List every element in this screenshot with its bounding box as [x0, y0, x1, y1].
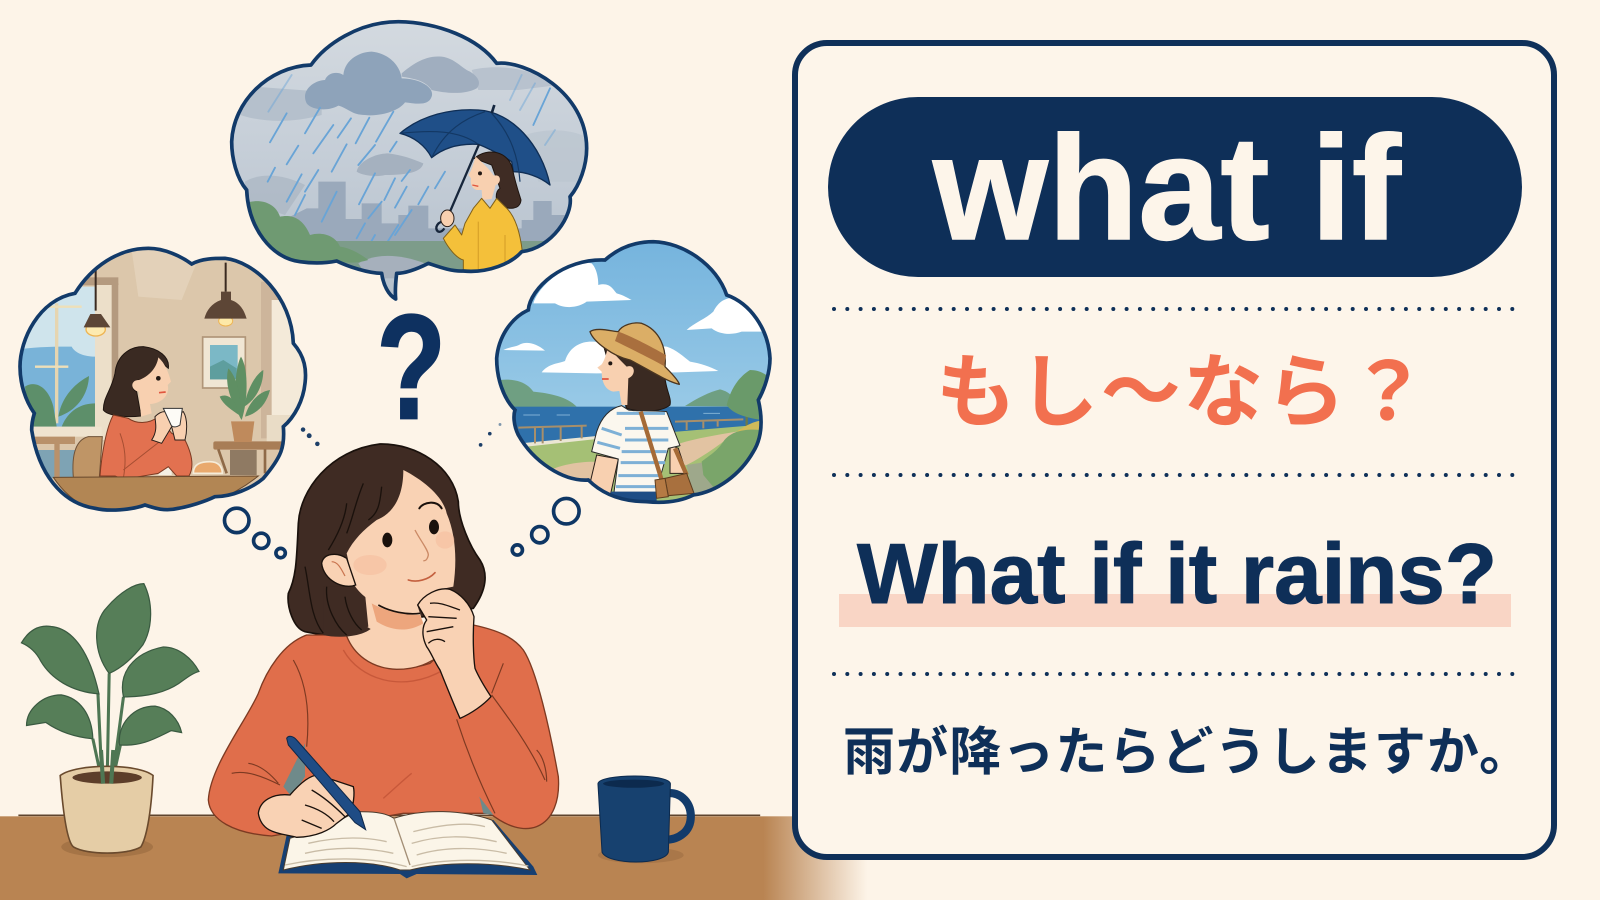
grass [528, 426, 746, 500]
thought bubble: rainy scene [225, 15, 595, 305]
left window [24, 286, 95, 357]
pen [287, 736, 366, 830]
bushes [702, 430, 759, 487]
heading pill: what if [828, 97, 1522, 277]
tree [746, 416, 748, 426]
striped shirt [592, 406, 680, 492]
nose [415, 530, 428, 561]
thought bubble: cafe scene [15, 240, 315, 520]
cheeks [353, 555, 387, 575]
potted plant [21, 584, 199, 857]
bag strap [641, 412, 687, 480]
face [468, 157, 500, 200]
chin line [378, 605, 420, 614]
bang strands [328, 483, 382, 550]
smile [408, 573, 435, 581]
open book [278, 812, 537, 878]
leaves [21, 584, 199, 745]
left lamp [94, 270, 97, 311]
thought bubble: seaside scene [490, 235, 780, 515]
pastry [193, 462, 222, 473]
picture [203, 337, 245, 388]
bag [665, 473, 694, 496]
hair [103, 347, 168, 417]
sweater [208, 625, 559, 836]
face [347, 470, 455, 609]
mug [598, 776, 691, 863]
woman [208, 444, 559, 878]
sweater seams [232, 660, 547, 813]
handle [436, 144, 479, 232]
seaside sand strip [526, 436, 595, 446]
chair glimpses [283, 743, 305, 797]
straw hat [590, 323, 679, 384]
arms [590, 455, 618, 497]
example highlight [839, 594, 1511, 627]
stems [93, 673, 123, 782]
umbrella [400, 110, 550, 185]
japanese meaning: もし〜なら？ [936, 328, 1428, 444]
divider dots [834, 309, 1517, 674]
plant [220, 357, 270, 420]
panel: vocabulary card [795, 43, 1554, 857]
chair [73, 437, 102, 477]
skyline [287, 182, 572, 242]
sweater [100, 415, 192, 479]
clouds [503, 263, 767, 373]
hair [474, 152, 521, 208]
face [597, 347, 634, 405]
sea [503, 407, 767, 444]
desk scene base: table [0, 815, 867, 900]
face [132, 357, 171, 417]
jeans [611, 492, 657, 507]
question mark: ? [377, 283, 446, 450]
distant hills [500, 380, 577, 408]
right window [261, 282, 278, 438]
table top [53, 476, 258, 512]
paths [554, 462, 594, 480]
heading pill: what if: what if [932, 106, 1402, 271]
ground [336, 241, 544, 270]
hair [603, 342, 670, 411]
dashed connectors [301, 423, 501, 447]
thought circles: right [512, 498, 579, 555]
plant pot [231, 421, 254, 442]
bushes [245, 201, 368, 265]
dark rain clouds [402, 56, 479, 93]
right lamp [224, 262, 227, 292]
side table [230, 450, 257, 475]
rain streaks [268, 75, 555, 248]
lower hair tip [323, 587, 371, 637]
chin hand [418, 589, 491, 718]
raincoat [443, 198, 522, 275]
thought circles: left [224, 508, 285, 558]
railing [518, 419, 743, 443]
neck [347, 593, 443, 669]
props group [21, 283, 691, 863]
japanese translation: 雨が降ったらどうしますか。 [843, 710, 1531, 785]
eyes and brow [382, 533, 392, 547]
hands with cup [152, 412, 187, 443]
hand [441, 210, 454, 227]
writing hand [258, 775, 354, 837]
ear [322, 554, 356, 586]
example sentence: What if it rains? [857, 527, 1497, 622]
pot [60, 766, 153, 853]
back hair [288, 444, 485, 636]
